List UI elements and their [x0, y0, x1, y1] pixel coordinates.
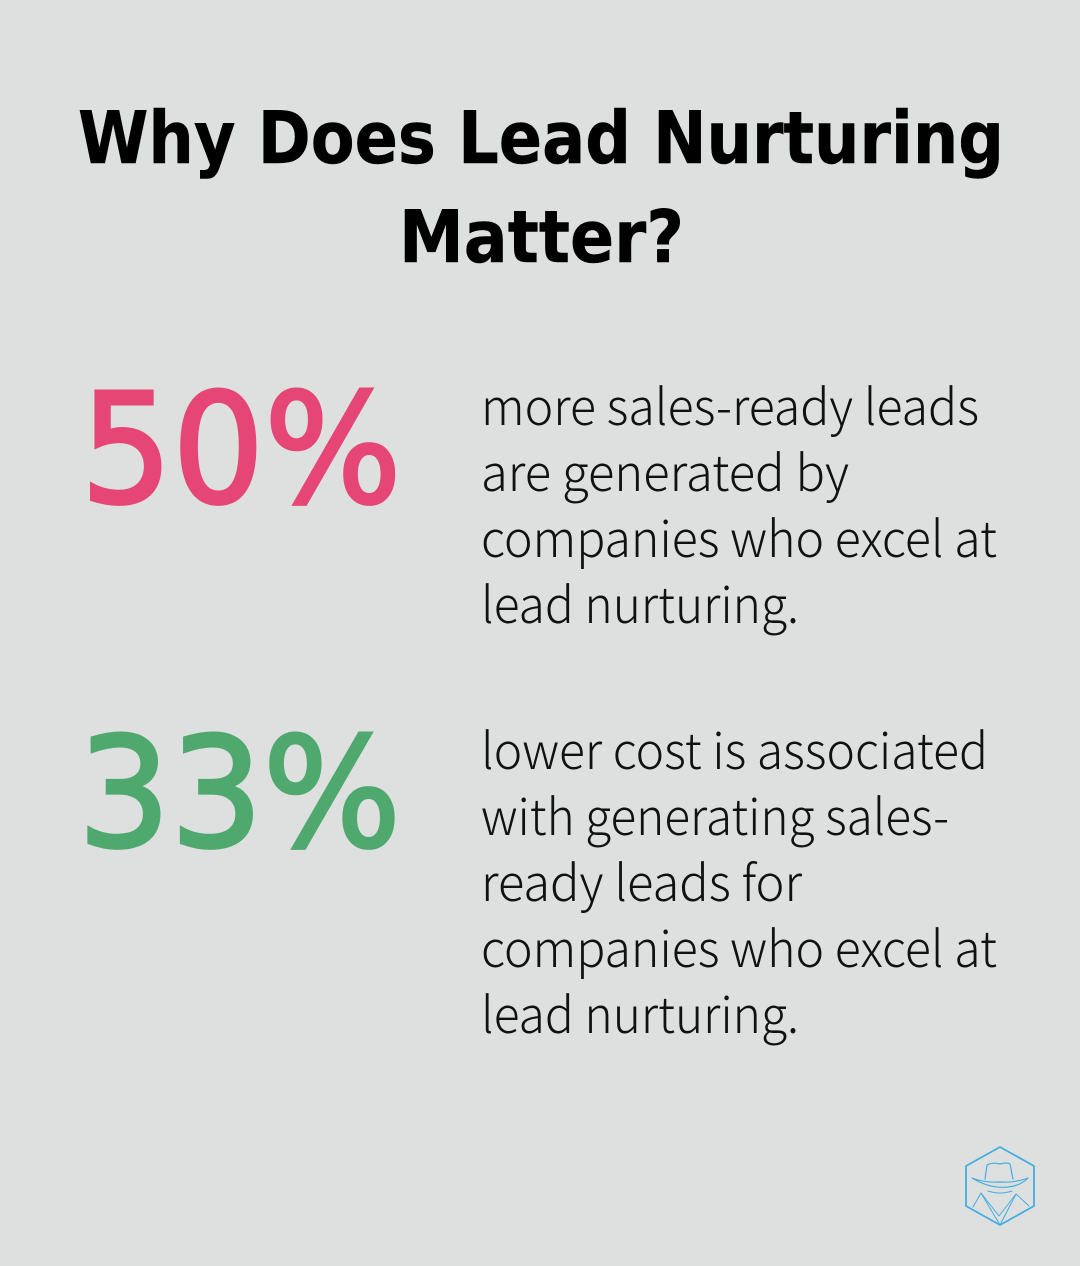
text block: 50% description: more sales-ready leads — [481, 368, 979, 440]
text block: 33% description: lead nurturing. — [481, 976, 799, 1048]
text block: 33% description: ready leads for — [481, 844, 803, 916]
text block: 33% description: with generating sales- — [481, 778, 949, 850]
statistic: 33%: 33% — [78, 705, 401, 882]
text block: 50% description: are generated by — [481, 434, 849, 506]
text block: 33% description — [481, 712, 997, 1048]
icon: logo, hexagon with hat-wearing spy — [966, 1147, 1034, 1225]
text block: 50% description — [481, 368, 997, 638]
text block: 50% description: companies who excel at — [481, 500, 997, 572]
title: Matter? — [399, 195, 684, 279]
text block: 50% description: lead nurturing. — [481, 566, 799, 638]
title — [78, 96, 1004, 279]
text block: 33% description: lower cost is associated — [481, 712, 988, 784]
statistic: 50%: 50% — [80, 361, 402, 538]
text block: 33% description: companies who excel at — [481, 910, 997, 982]
